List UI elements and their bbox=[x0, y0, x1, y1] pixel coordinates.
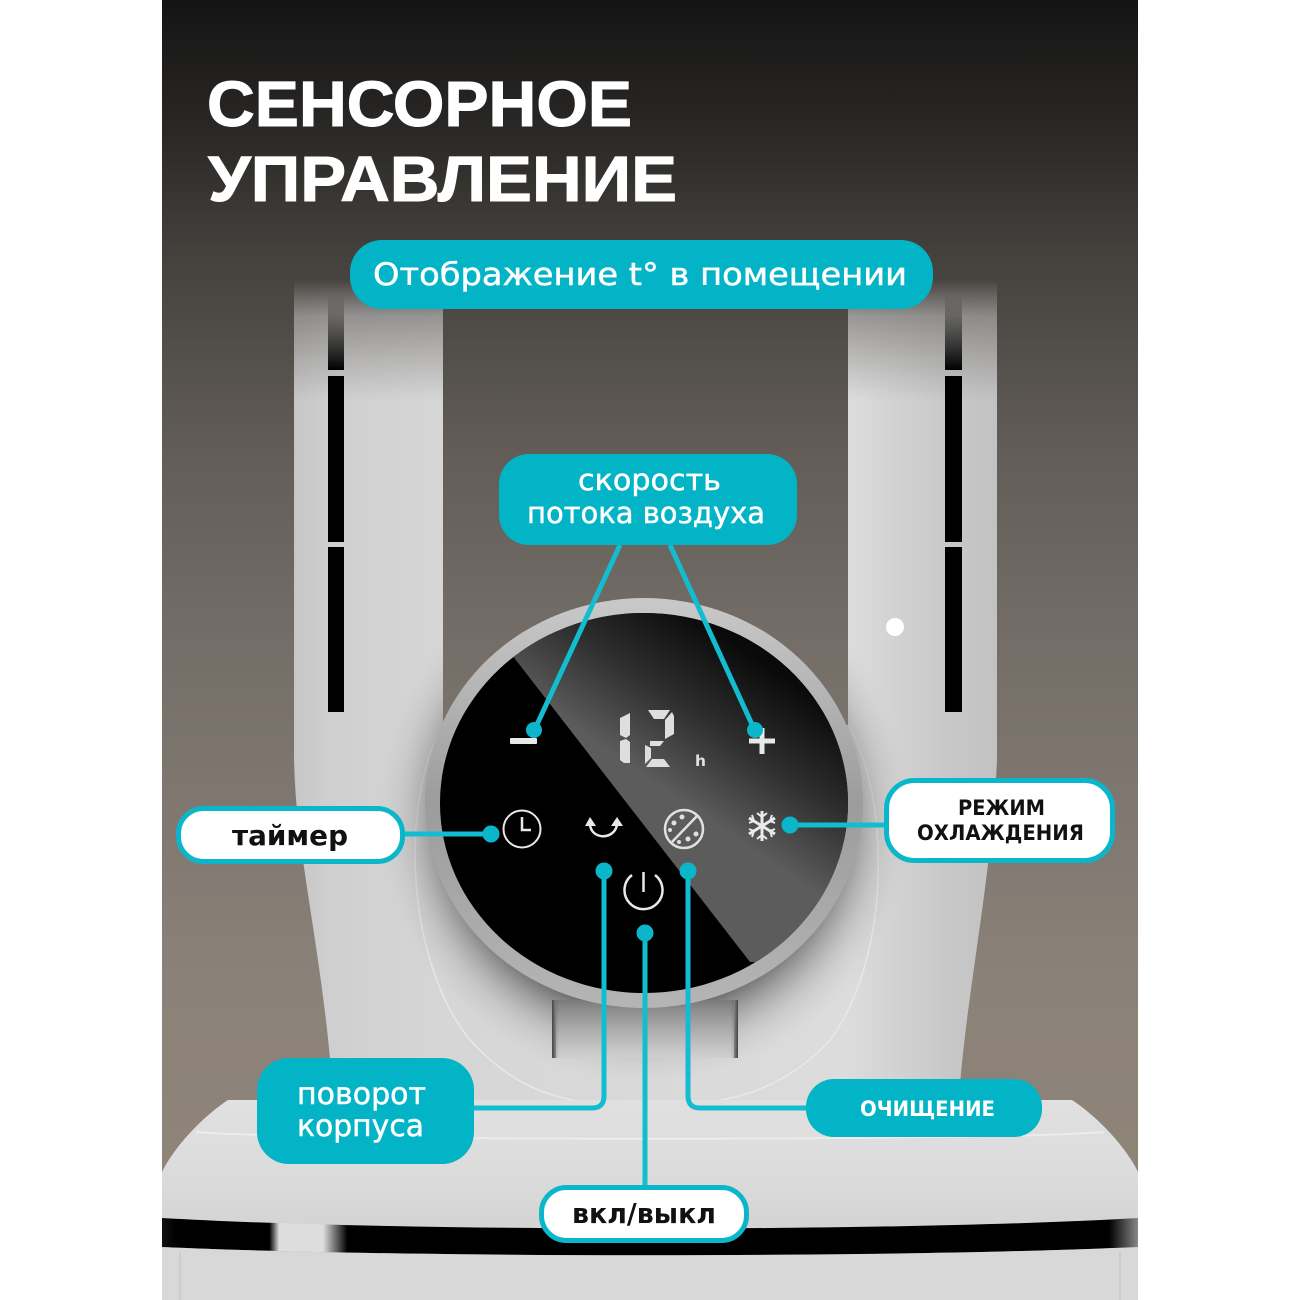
dot timer bbox=[482, 826, 500, 842]
control panel bbox=[425, 590, 900, 1008]
icon: clock timer bbox=[504, 810, 540, 848]
title bbox=[207, 68, 677, 215]
device illustration bbox=[162, 280, 1138, 1300]
callout: body rotation: поворот bbox=[297, 1077, 426, 1112]
connector dots bbox=[482, 722, 798, 942]
callout: body rotation bbox=[257, 1058, 474, 1164]
black glass bbox=[440, 613, 848, 993]
callout: body rotation: корпуса bbox=[297, 1109, 424, 1144]
neck bracket bbox=[552, 1000, 738, 1058]
line to cooling mode bbox=[790, 822, 884, 828]
image panel background bbox=[162, 0, 1138, 1300]
line to timer bbox=[405, 832, 491, 836]
icon: snowflake bbox=[749, 811, 775, 841]
base unit bbox=[162, 1100, 1138, 1240]
callout: cooling mode: РЕЖИМ bbox=[958, 796, 1045, 820]
lower housing bbox=[162, 1247, 1138, 1300]
status light bbox=[886, 618, 904, 636]
line to purification bbox=[688, 871, 806, 1108]
callout: on/off: вкл/выкл bbox=[572, 1197, 716, 1230]
title line 1: СЕНСОРНОЕ bbox=[207, 68, 632, 140]
title line 2: УПРАВЛЕНИЕ bbox=[208, 143, 677, 215]
panel shadow bbox=[396, 668, 890, 1065]
dot power bbox=[636, 924, 654, 942]
callout: purification: ОЧИЩЕНИЕ bbox=[860, 1097, 995, 1121]
right vent slots bbox=[945, 295, 962, 712]
callout: on/off bbox=[542, 1188, 746, 1240]
callout: cooling mode: ОХЛАЖДЕНИЯ bbox=[917, 821, 1084, 845]
dot purification bbox=[680, 862, 696, 880]
U-shaped body with tower arms bbox=[294, 280, 997, 1110]
callout: timer: таймер bbox=[232, 819, 348, 852]
icon: minus bbox=[510, 738, 537, 744]
icon: plus bbox=[749, 728, 775, 754]
silver ring bbox=[425, 598, 863, 1008]
left vent slots bbox=[328, 295, 344, 712]
callout: room temperature bbox=[350, 240, 933, 309]
line to plus bbox=[670, 545, 755, 731]
black chrome band bbox=[162, 1218, 1138, 1255]
line to power bbox=[642, 933, 648, 1185]
connector lines bbox=[405, 545, 884, 1185]
display digits 12 bbox=[620, 710, 674, 767]
line to rotation bbox=[474, 871, 604, 1108]
line to minus bbox=[534, 545, 620, 731]
display unit: h bbox=[695, 752, 706, 770]
callout: airflow speed: скорость bbox=[578, 463, 721, 497]
icon: rotate arrows bbox=[585, 817, 623, 836]
dot rotation bbox=[596, 862, 612, 880]
dot plus bbox=[747, 722, 763, 738]
callout: airflow speed: потока воздуха bbox=[527, 496, 765, 530]
callout: cooling mode bbox=[886, 780, 1112, 860]
dot cooling bbox=[782, 816, 798, 834]
callout: room temperature: Отображение t° в помещении bbox=[373, 257, 907, 293]
dot minus bbox=[526, 722, 542, 738]
glass reflection bbox=[514, 613, 848, 962]
lower housing seam bbox=[180, 1252, 1120, 1300]
callout: timer bbox=[178, 808, 402, 862]
icon: power bbox=[624, 872, 663, 909]
callout: purification bbox=[806, 1079, 1042, 1137]
body crease bbox=[415, 725, 878, 1106]
callout: airflow speed bbox=[499, 454, 797, 545]
base top edge bbox=[196, 1132, 1104, 1139]
icon: purification bbox=[665, 810, 703, 848]
